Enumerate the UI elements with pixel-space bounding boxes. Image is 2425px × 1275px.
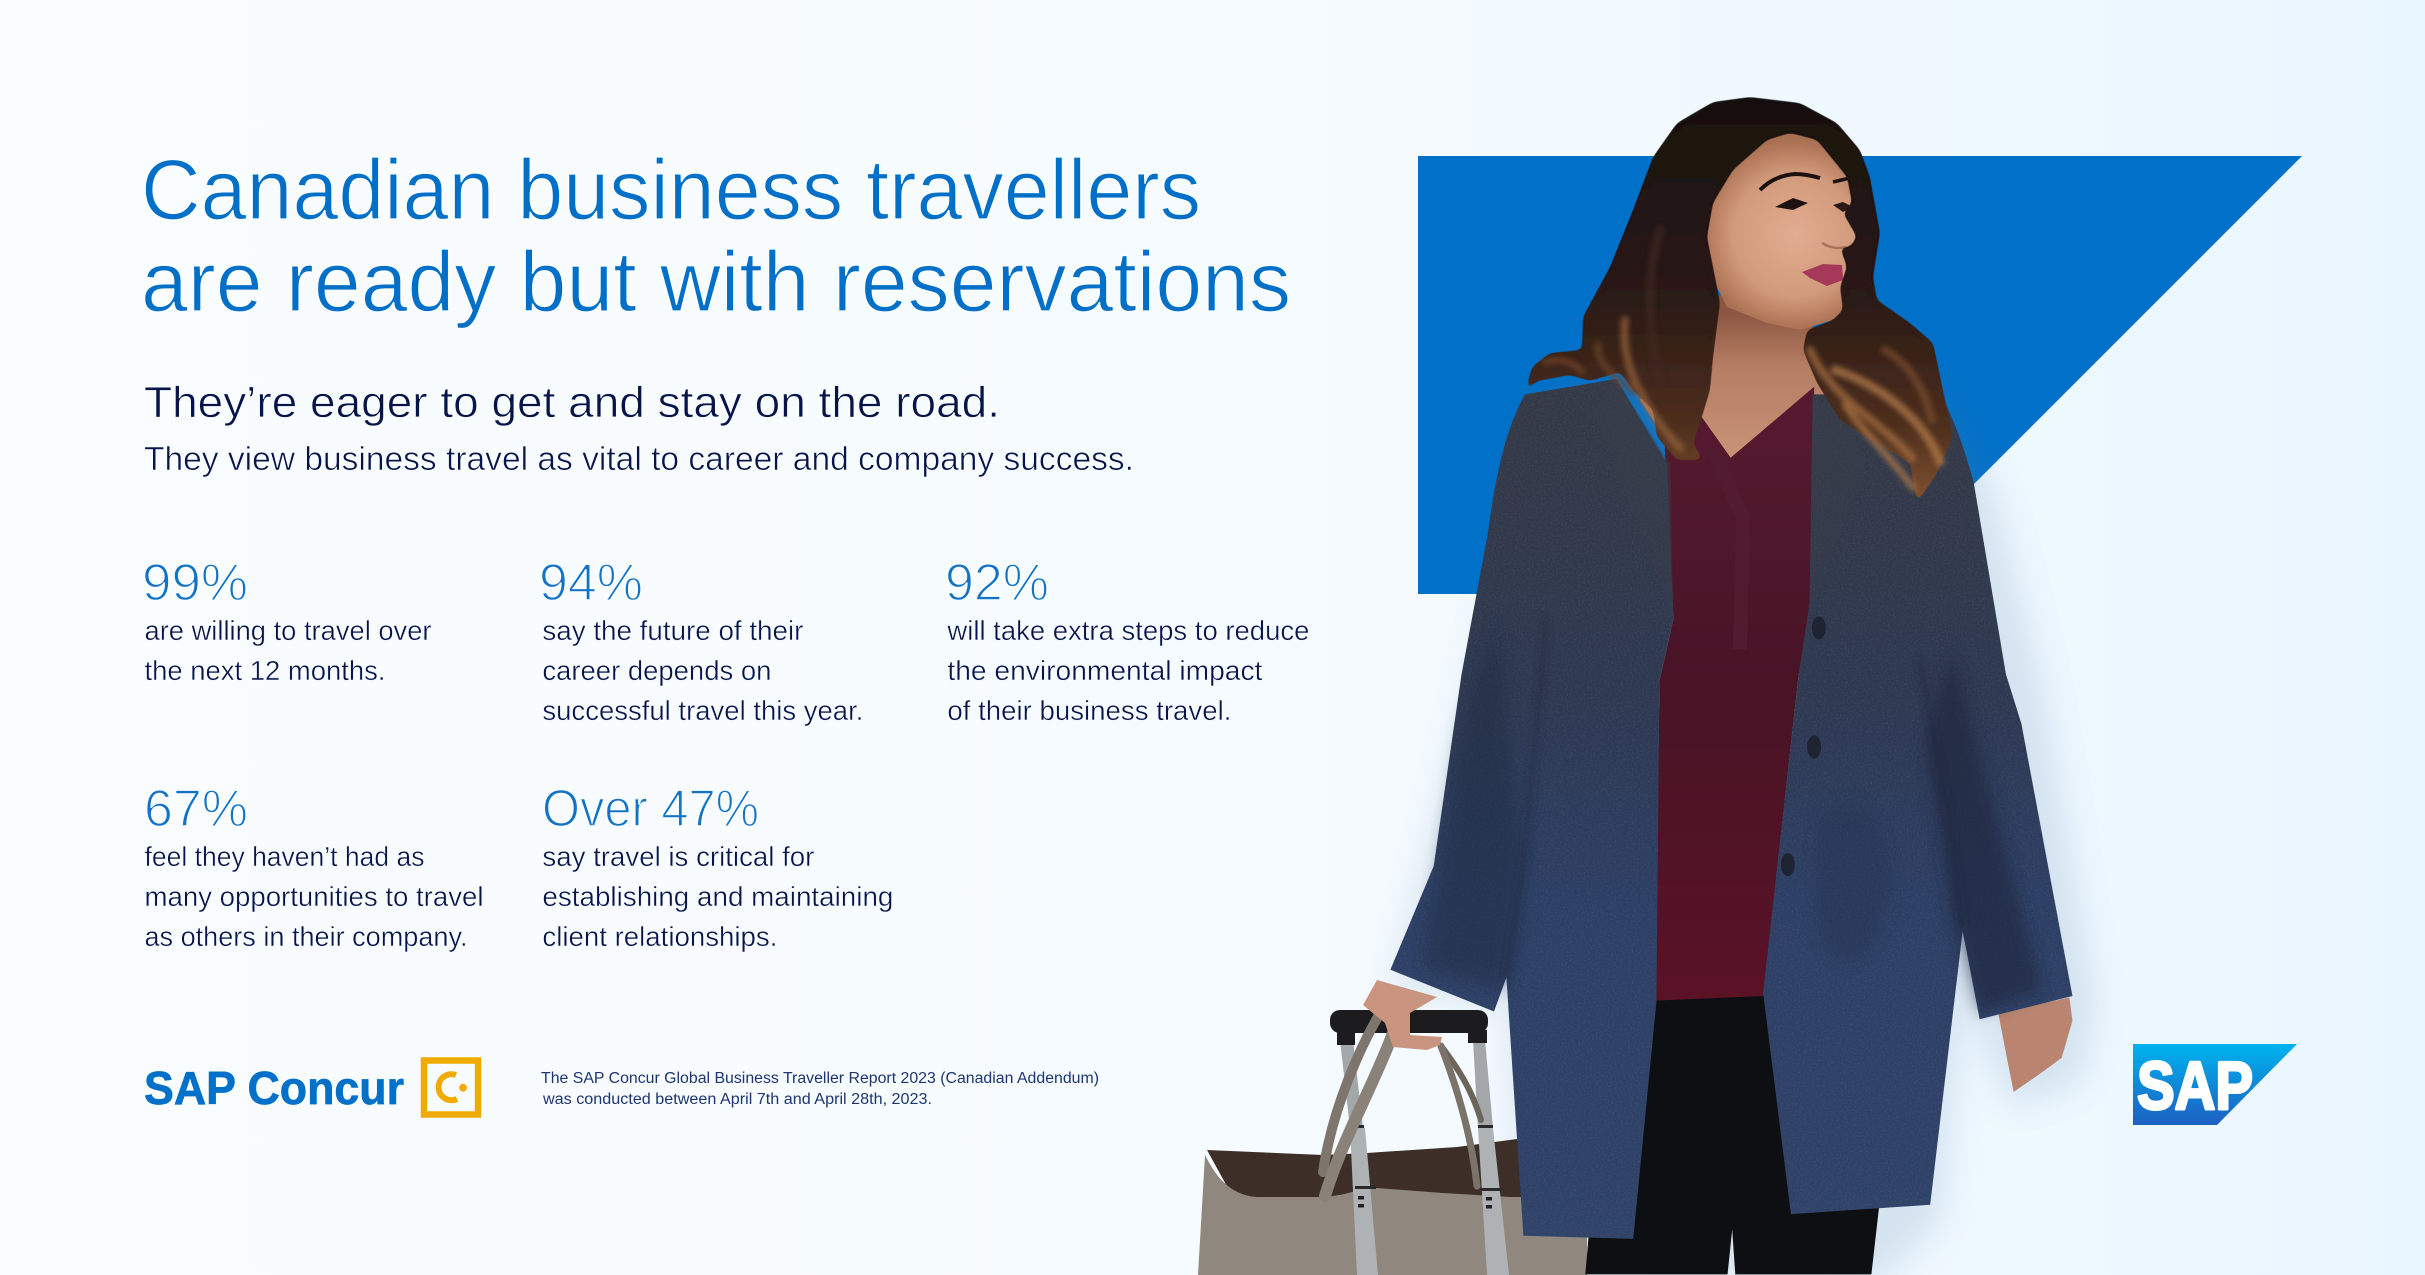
stat: 94%: say the future of their [542,615,803,646]
tote bag [1198,1139,1587,1275]
stat: 94%: 94% [539,554,643,612]
title: are ready but with reservations [141,235,1291,330]
stat: 67%: feel they haven’t had as [144,841,424,872]
stat: 92% [945,554,1309,726]
stat: 67%: many opportunities to travel [144,881,484,912]
bag straps [1323,1005,1481,1196]
stat: 92%: 92% [945,554,1049,612]
trolley handle and poles [1330,1010,1509,1275]
stat: 99%: the next 12 months. [144,655,386,686]
subheading: They view business travel as vital to career and company success. [144,440,1134,477]
stat: 67% [144,780,484,952]
shirt [1655,387,1814,1001]
right hand [1998,998,2072,1092]
stat: over 47%: Over 47% [542,780,759,838]
face [1700,122,1866,330]
footnote: was conducted between April 7th and April 28th, 2023. [542,1091,932,1108]
stat: 67%: 67% [144,780,248,838]
footnote: The SAP Concur Global Business Traveller Report 2023 (Canadian Addendum) [541,1070,1099,1087]
stat: 99%: are willing to travel over [144,615,432,646]
photo: business traveller with bag [1198,97,2096,1275]
logo: SAP: SAP [2137,1048,2253,1124]
stat: over 47%: client relationships. [542,921,777,952]
neck and chest [1640,295,1830,470]
stat: 94%: career depends on [542,655,771,686]
footnote [541,1070,1099,1108]
stat: 92%: the environmental impact [947,655,1263,686]
subheading [144,378,1134,477]
stat: over 47%: say travel is critical for [542,841,814,872]
title: Canadian business travellers [141,143,1201,238]
stat: 94% [539,554,863,726]
subheading: They’re eager to get and stay on the road. [144,378,1000,427]
stat: 92%: will take extra steps to reduce [946,615,1309,646]
title [141,143,1291,330]
coat buttons [1781,616,1826,876]
stat: over 47% [542,780,893,952]
stat: 92%: of their business travel. [947,695,1231,726]
hand on handle [1363,980,1442,1050]
trousers [1585,990,1879,1274]
logo: SAP Concur: SAP Concur [144,1062,404,1114]
blue brand shape [1418,156,2302,594]
coat [1390,379,2072,1239]
stat: 99% [142,554,432,686]
stat: 99%: 99% [142,554,248,612]
hair [1525,97,1953,503]
stat: 94%: successful travel this year. [542,695,863,726]
stat: 67%: as others in their company. [144,921,468,952]
stat: over 47%: establishing and maintaining [542,881,893,912]
